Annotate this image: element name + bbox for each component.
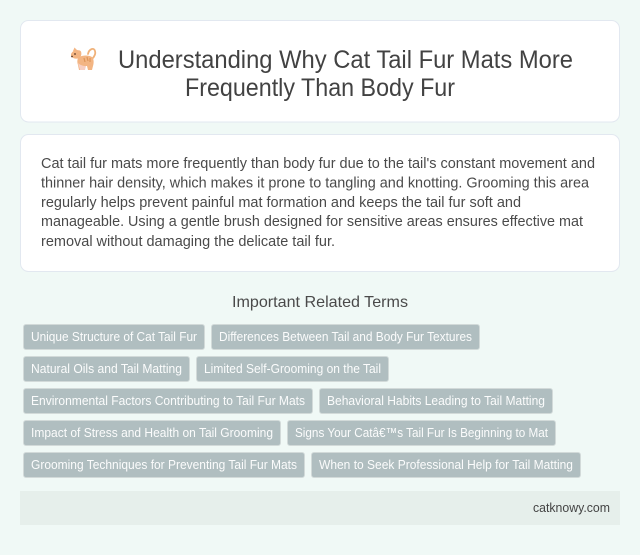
tag: When to Seek Professional Help for Tail Matting [319, 457, 573, 472]
tag [24, 388, 312, 414]
tag: Environmental Factors Contributing to Tail Fur Mats [31, 393, 305, 408]
tag: Grooming Techniques for Preventing Tail Fur Mats [31, 457, 297, 472]
tag [24, 324, 204, 350]
title [118, 46, 573, 102]
tag [288, 420, 556, 446]
tag [24, 452, 304, 478]
summary text: removal without damaging the delicate tail fur. [41, 233, 335, 250]
tag [196, 356, 388, 382]
title: Frequently Than Body Fur [185, 74, 455, 102]
summary text [41, 155, 595, 250]
title: Understanding Why Cat Tail Fur Mats More [118, 46, 573, 74]
tag list [24, 324, 580, 478]
heading: related terms: Important Related Terms [232, 294, 408, 311]
tag [320, 388, 552, 414]
footer source: catknowy.com [533, 500, 610, 515]
tag: Differences Between Tail and Body Fur Textures [219, 329, 472, 344]
tag: Unique Structure of Cat Tail Fur [31, 329, 198, 344]
panel: summary card [20, 134, 620, 272]
tag: Behavioral Habits Leading to Tail Matting [327, 393, 545, 408]
summary text: manageable. Using a gentle brush designed for sensitive areas ensures effective mat [41, 213, 584, 230]
tag: Impact of Stress and Health on Tail Grooming [31, 425, 273, 440]
tag [312, 452, 580, 478]
tag: Signs Your Catâ€™s Tail Fur Is Beginning to Mat [295, 425, 548, 440]
tag: Natural Oils and Tail Matting [31, 361, 182, 376]
tag [24, 420, 280, 446]
tag [24, 356, 190, 382]
footer [20, 491, 620, 525]
panel: title card [20, 20, 620, 122]
summary text: regularly helps prevent painful mat formation and keeps the tail fur soft and [41, 194, 521, 211]
summary text: Cat tail fur mats more frequently than body fur due to the tail's constant movement and [41, 155, 595, 172]
tag: Limited Self-Grooming on the Tail [204, 361, 381, 376]
icon: cat [71, 48, 95, 70]
summary text: thinner hair density, which makes it prone to tangling and knotting. Grooming this area [41, 174, 590, 192]
tag [212, 324, 480, 350]
